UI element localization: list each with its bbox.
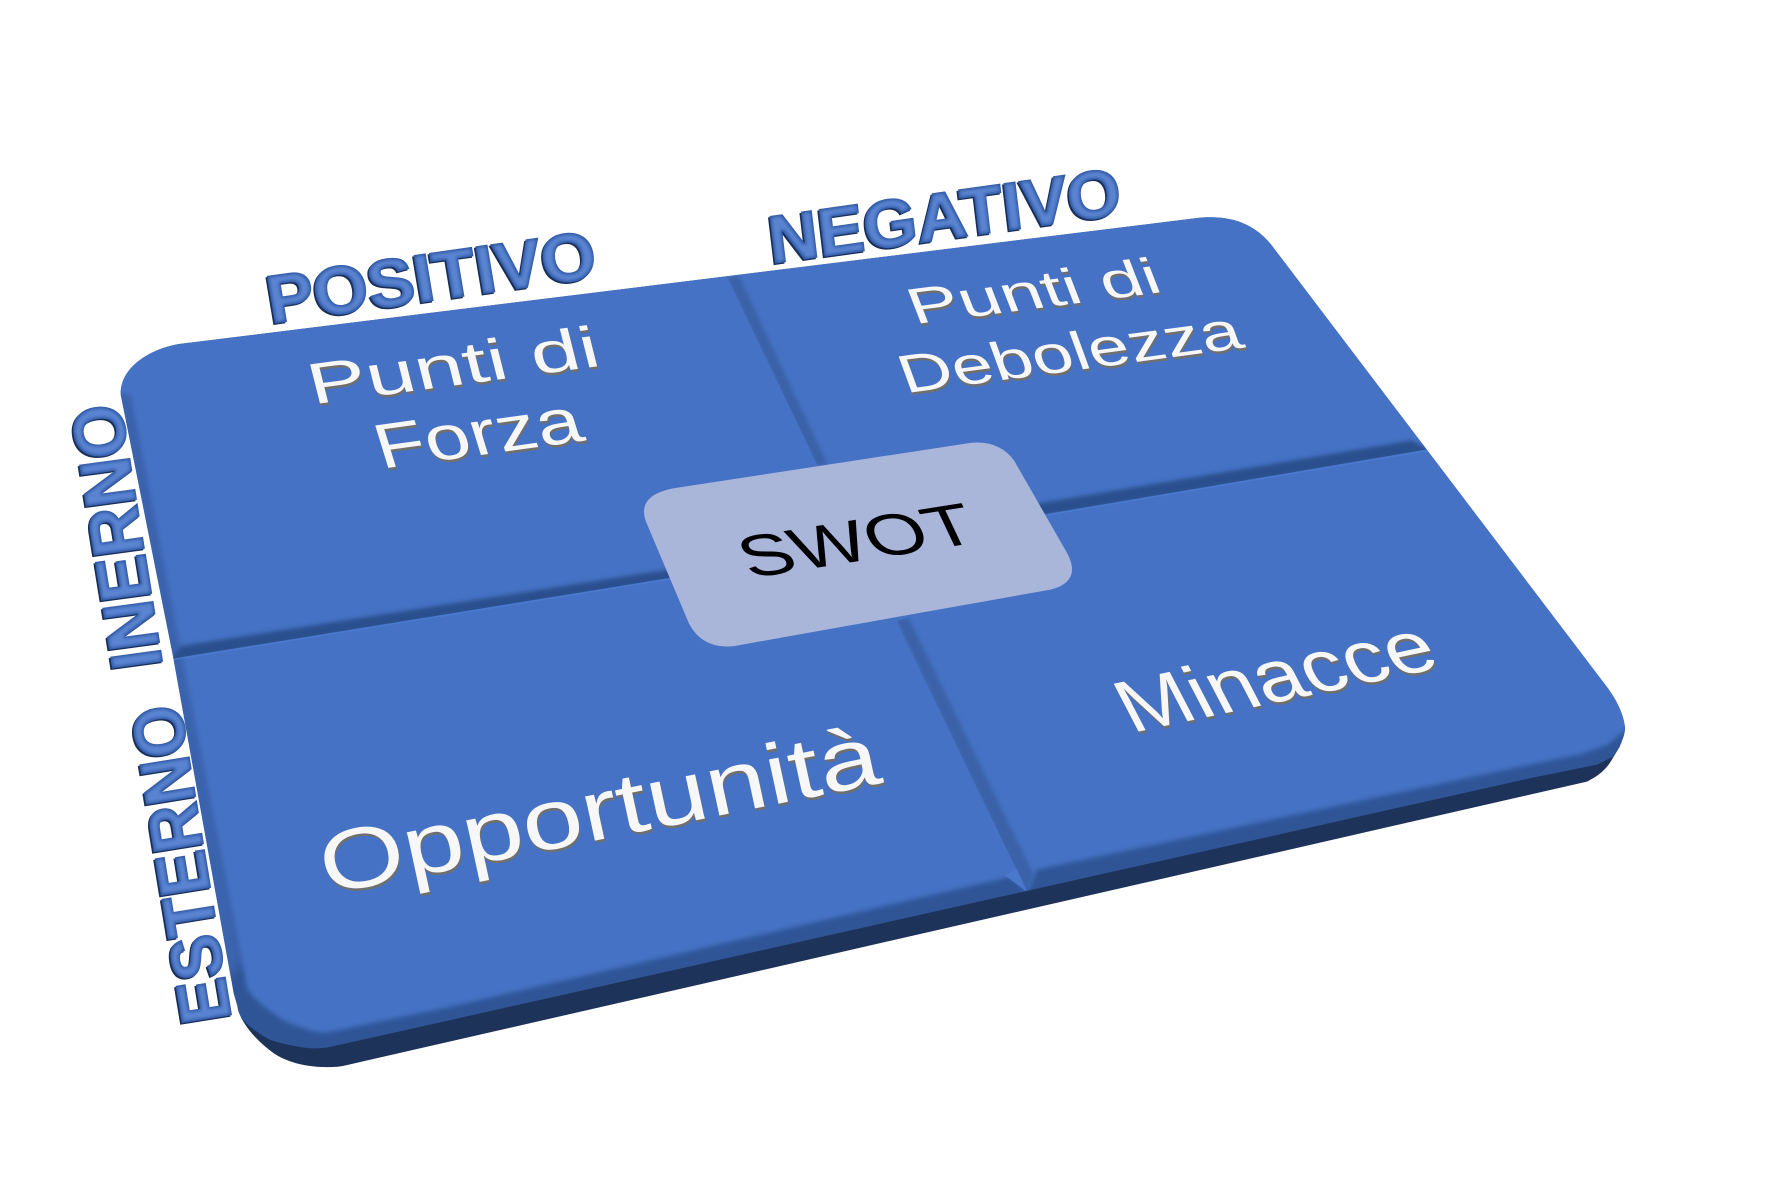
quadrant label: Punti di Forza: Forza xyxy=(365,385,591,482)
groove: right horizontal divider xyxy=(1030,441,1432,518)
center pad with SWOT xyxy=(644,443,1072,646)
SWOT diagram xyxy=(72,170,1626,1068)
quadrant label: Punti di Forza xyxy=(300,314,606,482)
quadrant label: Punti di Debolezza xyxy=(889,247,1250,404)
groove: bottom vertical divider xyxy=(895,617,1035,892)
quadrant label: Punti di Forza: Punti di xyxy=(300,314,606,417)
axis label: POSITIVO: POSITIVO xyxy=(261,217,602,338)
axis label: INERNO: INERNO xyxy=(55,400,178,674)
board side: dark navy thickness xyxy=(232,723,1620,1067)
axis label: NEGATIVO: NEGATIVO xyxy=(764,155,1125,278)
center text: SWOT xyxy=(726,491,988,591)
board top: bevelled blue surface xyxy=(120,217,1626,1048)
groove notch highlight at bottom edge xyxy=(1005,869,1027,892)
board: 3D SWOT slab xyxy=(120,217,1626,1068)
quadrant label: Punti di Debolezza: Punti di xyxy=(898,247,1169,335)
groove: left horizontal divider xyxy=(169,568,678,662)
quadrant label: Punti di Debolezza: Debolezza xyxy=(889,300,1250,404)
axis label: ESTERNO: ESTERNO xyxy=(116,700,247,1029)
quadrant label: Minacce: Minacce xyxy=(1100,605,1451,748)
groove: top vertical divider xyxy=(726,276,828,465)
quadrant label: Opportunità: Opportunità xyxy=(310,706,889,912)
